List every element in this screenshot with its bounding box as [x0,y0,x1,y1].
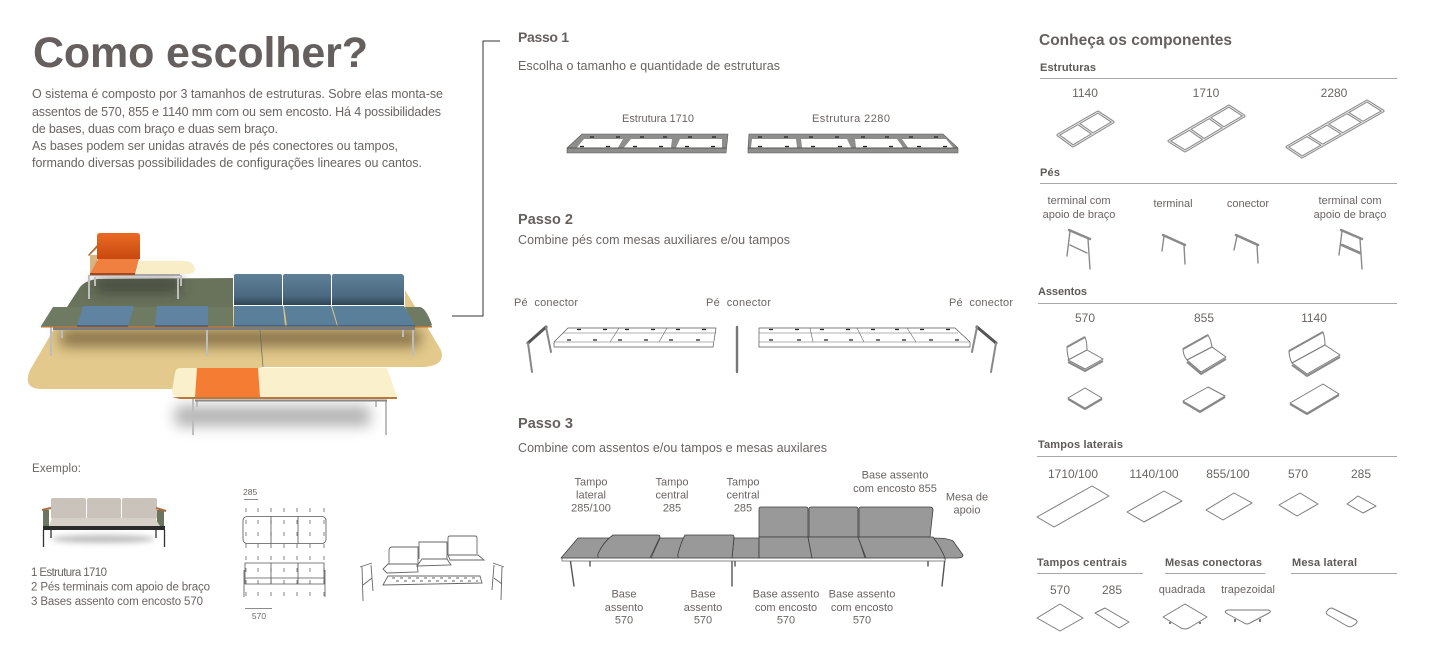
intro text: de bases, duas com braço e duas sem braço. [32,122,278,136]
side table drawing [1326,608,1357,627]
connector tables heading: Mesas conectoras [1165,557,1262,569]
isometric frames [1058,101,1383,157]
intro text [32,87,443,170]
blue sofa row with green tops [41,274,432,356]
side table heading: Mesa lateral [1292,557,1357,569]
top part labels: apoio [954,504,980,516]
seat sizes: 570 [1075,311,1095,325]
rug: green [67,278,233,307]
step 2 [514,212,1013,372]
central top sizes [1050,583,1122,597]
central top sizes: 570 [1050,583,1070,597]
step 1 description: Escolha o tamanho e quantidade de estruturas [518,59,780,73]
seats with backrest [1067,332,1340,376]
bottom part labels [605,588,895,626]
top part labels: com encosto 855 [853,483,937,495]
structure sizes: 1710 [1193,86,1220,100]
bottom part labels: Base assento [829,588,895,600]
intro text: O sistema é composto por 3 tamanhos de estruturas. Sobre elas monta-se [32,87,443,101]
feet labels: conector [1227,198,1269,210]
connector table drawings [1163,604,1270,629]
bottom part labels: assento [684,602,722,614]
section: side tops [1037,439,1397,527]
side tops heading: Tampos laterais [1038,439,1123,451]
bottom part labels: 570 [777,614,795,626]
example component list: 3 Bases assento com encosto 570 [31,596,203,608]
feet heading: Pés [1040,167,1060,179]
bottom part labels: Base [690,588,716,600]
central tops heading: Tampos centrais [1037,557,1127,569]
feet labels: terminal com [1319,195,1381,207]
bottom part labels: Base [611,588,637,600]
step 3 description: Combine com assentos e/ou tampos e mesas auxilares [518,441,827,455]
structure 1710 frame [567,134,728,153]
seat sizes [1075,311,1327,325]
top part labels: central [655,490,689,502]
step 3 [518,416,988,626]
connector table labels: quadrada [1159,584,1206,596]
side top sizes: 570 [1288,467,1308,481]
section: connector tables [1159,557,1275,629]
side top drawings [1037,486,1376,527]
section: side table [1291,557,1397,627]
side top sizes: 1140/100 [1129,467,1179,481]
structure sizes: 2280 [1321,86,1348,100]
rug: tan [28,290,442,389]
structure labels: Estrutura 2280 [812,113,890,125]
feet labels: apoio de braço [1314,209,1386,221]
section: seats [1038,286,1397,414]
step 3 heading: Passo 3 [518,416,573,432]
connector table labels: trapezoidal [1221,584,1275,596]
top part labels: Base assento [862,470,928,482]
structure labels [622,113,890,125]
top part labels: 285 [734,502,752,514]
seat sizes: 855 [1194,311,1214,325]
structure labels: Estrutura 1710 [622,113,694,125]
step 1 [518,29,958,153]
side top sizes [1048,467,1371,481]
central top sizes: 285 [1102,583,1122,597]
floor shadows [60,278,420,426]
example component list: 2 Pés terminais com apoio de braço [31,582,210,594]
components heading: Conheça os componentes [1039,32,1232,49]
structure 2280 frame [748,134,958,153]
connector table labels [1159,584,1275,596]
bottom part labels: 570 [853,614,871,626]
structure sizes: 1140 [1072,86,1098,100]
front cream bench with orange seat [172,368,397,435]
intro text: As bases podem ser unidas através de pés conectores ou tampos, [32,139,398,153]
bottom part labels: 570 [615,614,633,626]
connector feet [528,327,996,372]
section: feet [1040,167,1397,269]
top part labels: 285/100 [571,502,611,514]
top part labels: 285 [663,502,681,514]
assembled sofa diagram [561,507,963,586]
bottom part labels: Base assento [753,588,819,600]
side top sizes: 1710/100 [1048,467,1098,481]
seats heading: Assentos [1038,286,1087,298]
top part labels: Tampo [655,476,689,488]
step 2 description: Combine pés com mesas auxiliares e/ou tampos [518,233,790,247]
step 2 heading: Passo 2 [518,212,573,228]
example component list: 1 Estrutura 1710 [31,567,107,579]
bottom part labels: com encosto [831,602,893,614]
connector foot labels: Pé conector [949,297,1013,309]
dimension plan drawing [243,487,326,621]
example component list [31,567,210,608]
feet labels: terminal [1153,198,1193,210]
orange armchair with side table [88,233,195,299]
intro text: formando diversas possibilidades de configurações lineares ou cantos. [32,156,422,170]
product photo: modular sofa composition [28,233,442,435]
intro text: assentos de 570, 855 e 1140 mm com ou sem encosto. Há 4 possibilidades [32,105,441,119]
step 1 heading: Passo 1 [518,29,569,45]
title: Como escolher? [33,29,368,77]
exploded sofa drawing [360,536,504,601]
dimension plan drawing: 285 [243,487,257,497]
top part labels: central [726,490,760,502]
structures heading: Estruturas [1040,62,1096,74]
bottom part labels: 570 [694,614,712,626]
connector foot labels: Pé conector [514,297,578,309]
feet labels: terminal com [1048,195,1110,207]
connector line from product to steps [452,41,500,316]
example sofa photo [42,498,166,547]
example label: Exemplo: [32,463,81,475]
step 2 frame 2280 [759,328,970,347]
seat sizes: 1140 [1301,311,1327,325]
connector foot labels [514,297,1013,309]
top part labels: lateral [576,490,606,502]
feet labels: apoio de braço [1043,209,1115,221]
seats without backrest [1068,384,1339,414]
section: central tops [1037,557,1143,631]
side top sizes: 285 [1351,467,1371,481]
top part labels: Mesa de [946,492,988,504]
connector foot labels: Pé conector [706,297,771,309]
dimension plan drawing: 570 [252,611,266,621]
side top sizes: 855/100 [1206,467,1250,481]
bottom part labels: com encosto [755,602,817,614]
top part labels: Tampo [574,476,608,488]
central top drawings [1037,604,1129,631]
bottom part labels: assento [605,602,643,614]
feet labels [1043,195,1386,221]
top part labels [571,470,988,516]
example block [31,463,210,608]
step 2 frame 1710 [554,328,716,347]
top part labels: Tampo [726,476,760,488]
section: structures [1040,62,1397,157]
structure sizes [1072,86,1348,100]
feet drawings [1067,230,1362,269]
